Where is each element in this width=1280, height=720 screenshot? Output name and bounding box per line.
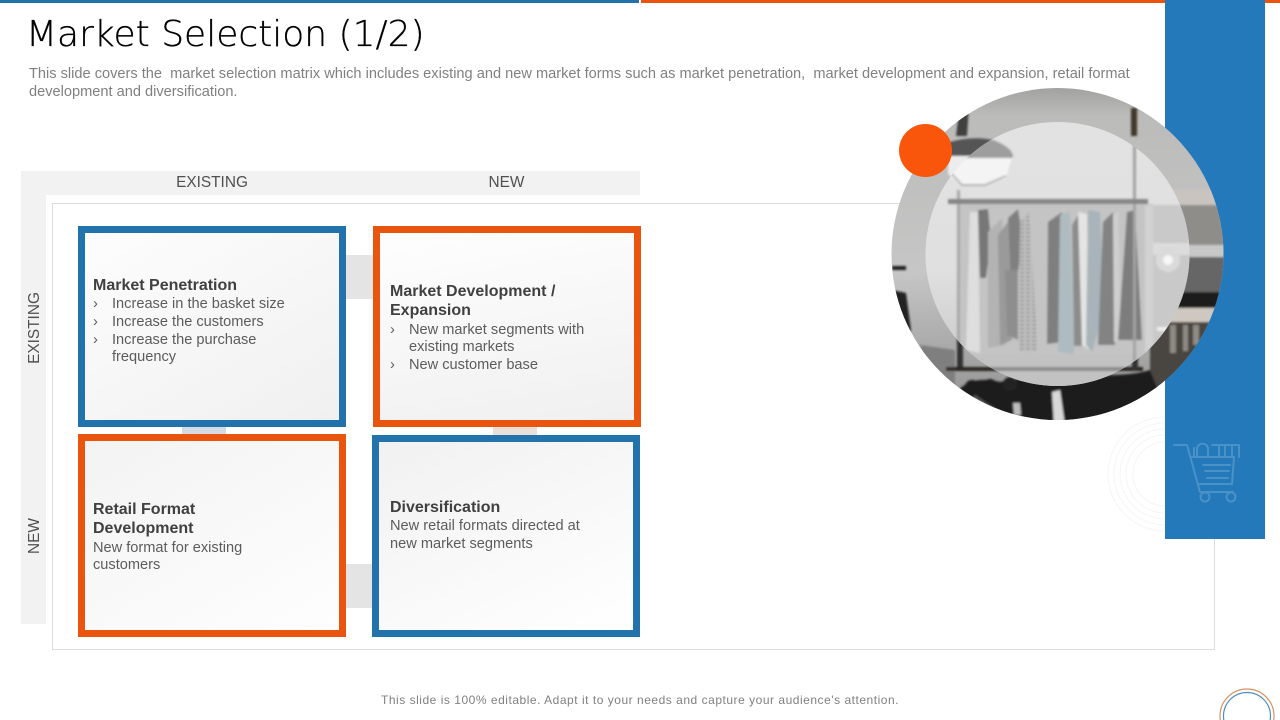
bullet list: market penetration: Increase in the basket size — [112, 296, 285, 312]
body: retail format development: New format for existing — [93, 540, 242, 556]
row label: existing: EXISTING — [26, 292, 43, 364]
wall — [892, 88, 1224, 420]
bullet list: market penetration: frequency — [112, 349, 176, 365]
rope top — [1131, 108, 1137, 136]
corner logo arcs — [1219, 688, 1275, 720]
heading: retail format development: Retail Format — [93, 501, 195, 518]
inner lamp — [1156, 255, 1180, 272]
panel: market penetration — [78, 226, 346, 427]
bullet list: market penetration: › — [93, 332, 98, 348]
title: Market Selection (1/2) — [26, 14, 425, 55]
bullet list: market development: existing markets — [409, 339, 514, 355]
top accent bar: orange — [641, 0, 1280, 3]
lamp shade — [950, 136, 993, 157]
body: diversification: new market segments — [390, 536, 533, 552]
body: diversification — [390, 518, 580, 552]
connector: right column — [493, 427, 537, 435]
body: retail format development: customers — [93, 557, 160, 573]
bullet list: market penetration: Increase the purchase — [112, 332, 256, 348]
intro text — [29, 66, 1130, 100]
bullet list: market penetration: › — [93, 314, 98, 330]
connector: left column — [182, 427, 226, 435]
column header band — [21, 171, 640, 195]
background store, right — [1174, 189, 1216, 206]
bullet list: market development: › — [390, 322, 395, 338]
ropes — [957, 190, 960, 370]
bullet list: market development: › — [390, 357, 395, 373]
lamp post — [956, 106, 969, 136]
heading: market penetration: Market Penetration — [93, 277, 237, 294]
heading: market development: Market Development / — [390, 283, 555, 300]
dark clothes — [959, 369, 1158, 420]
heading: market development: Expansion — [390, 302, 471, 319]
row header band — [21, 171, 46, 624]
left dark figure — [888, 290, 911, 345]
panel: market development / expansion — [373, 226, 641, 427]
backdrop behind rack — [960, 204, 1153, 354]
column label: existing: EXISTING — [176, 174, 248, 191]
panel: diversification — [372, 435, 640, 637]
left post and rail — [957, 335, 963, 371]
heading: retail format development — [93, 501, 195, 537]
bullet list: market penetration: › — [93, 296, 98, 312]
connector: top row — [346, 255, 373, 299]
panel: retail format development — [78, 434, 346, 637]
intro text: development and diversification. — [29, 84, 238, 100]
bullet list: market development: New market segments with — [409, 322, 584, 338]
decorative rings left of blue panel — [1108, 416, 1165, 532]
icon: shopping cart — [1173, 442, 1240, 502]
column label: new: NEW — [489, 174, 524, 191]
inner translucent circle — [920, 118, 1195, 395]
footer note: This slide is 100% editable. Adapt it to your needs and capture your audience's attention. — [381, 693, 899, 707]
lamp seen through overlay — [966, 139, 1014, 159]
bullet list: market development: New customer base — [409, 357, 538, 373]
blue side panel — [1165, 0, 1265, 539]
orange accent circle — [899, 124, 952, 177]
bullet list: market penetration: Increase the customers — [112, 314, 264, 330]
bullet list: market penetration — [93, 296, 285, 365]
lamp light — [947, 154, 971, 177]
photo: clothing rack in store — [892, 88, 1224, 420]
bullet list: market development — [390, 322, 584, 373]
garments — [966, 212, 980, 353]
rails — [948, 199, 1148, 204]
body: retail format development — [93, 540, 242, 573]
body: diversification: New retail formats directed at — [390, 518, 580, 534]
heading: market development — [390, 283, 556, 319]
connector: bottom row — [346, 564, 373, 608]
heading: diversification: Diversification — [390, 499, 500, 516]
heading: retail format development: Development — [93, 520, 193, 537]
top accent bar: blue — [0, 0, 639, 3]
row label: new: NEW — [26, 518, 43, 554]
matrix outer frame — [52, 203, 1215, 650]
intro text: This slide covers the market selection matrix which includes existing and new market forms such as market penetration, market development and expansion, retail format — [29, 66, 1130, 82]
